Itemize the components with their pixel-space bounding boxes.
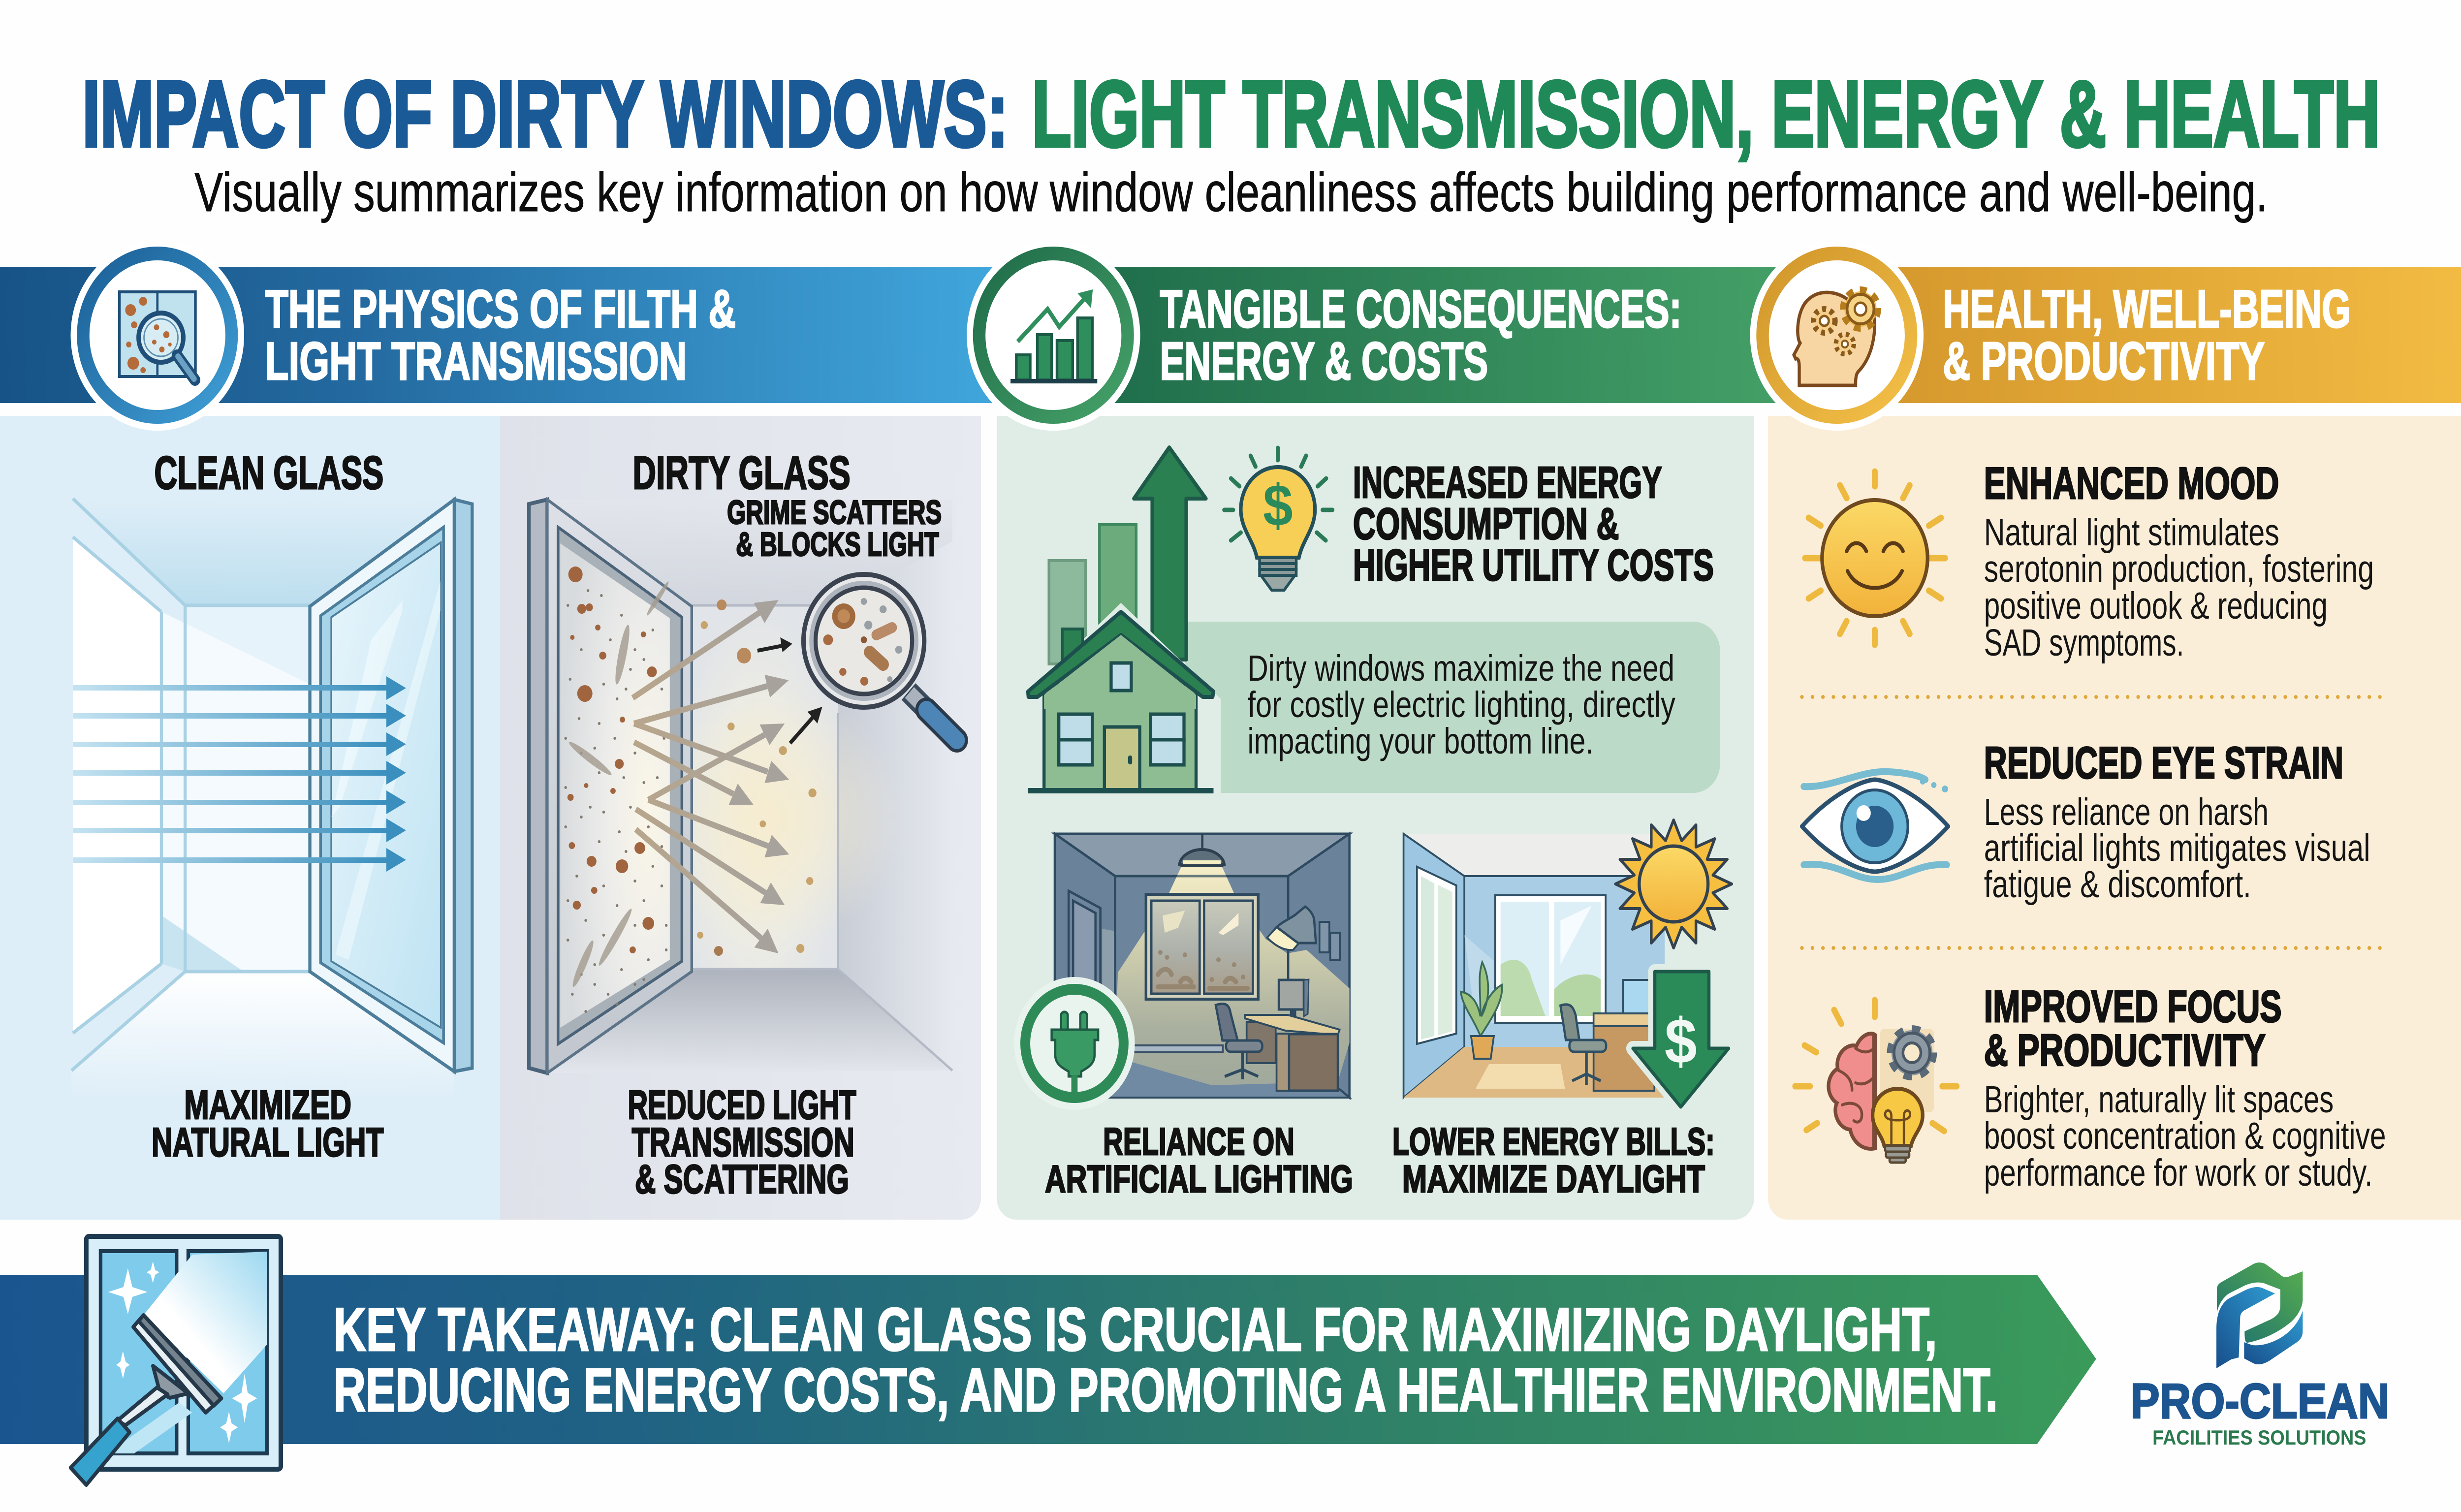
block: improved focus text: Brighter, naturally lit spaces [1984,1078,2334,1120]
ceiling [73,499,454,606]
callout: dirty windows text box [1185,622,1720,793]
label: reduced light transmission and scattering: REDUCED LIGHT [628,1082,856,1128]
header text: consequences [1160,280,1682,391]
heading: increased energy: INCREASED ENERGY [1353,458,1662,507]
dirty room walls [547,500,952,1073]
callout: dirty windows text box: for costly electric lighting, directly [1248,684,1675,725]
icon: bars, arrow and house [1022,447,1221,797]
header band: consequences [1053,267,1776,403]
block: reduced eye strain text: artificial lights mitigates visual [1984,826,2370,869]
label: reduced light transmission and scattering: TRANSMISSION [632,1119,854,1165]
block: improved focus text: IMPROVED FOCUS [1984,982,2282,1032]
label: grime scatters and blocks light [727,493,942,563]
label: grime scatters and blocks light: GRIME SCATTERS [727,493,942,531]
key takeaway text: KEY TAKEAWAY: CLEAN GLASS IS CRUCIAL FOR MAXIMIZING DAYLIGHT, [334,1296,1937,1364]
block: reduced eye strain text: Less reliance on harsh [1984,790,2269,833]
heading: clean glass: CLEAN GLASS [154,447,383,499]
icon: brain, gear and bulb [1795,1000,1956,1163]
label: maximized natural light [152,1082,383,1165]
block: reduced eye strain text: fatigue & discomfort. [1984,863,2251,905]
label: maximized natural light: MAXIMIZED [184,1082,351,1128]
label: reliance on artificial lighting [1045,1120,1353,1200]
ceiling lamp [1179,834,1224,867]
title: IMPACT OF DIRTY WINDOWS: [82,62,1009,166]
desk lamp [1267,907,1340,979]
icon: smiling sun [1805,472,1945,645]
heading: increased energy: CONSUMPTION & [1353,499,1619,549]
light rays [73,676,406,872]
block: improved focus text: & PRODUCTIVITY [1984,1026,2266,1075]
header band: physics [0,267,994,403]
icon: light bulb with dollar sign [1224,448,1332,590]
illustration: bright room with daylight [1404,834,1665,1098]
potted plant [1461,962,1502,1059]
heading: dirty glass: DIRTY GLASS [632,447,851,499]
callout: dirty windows text box: impacting your bottom line. [1248,721,1594,761]
label: grime scatters and blocks light: & BLOCKS LIGHT [736,525,939,563]
label: reduced light transmission and scattering [628,1082,856,1202]
pointer arrows [757,637,822,743]
bright desk, monitor and chair [1560,980,1654,1091]
block: reduced eye strain text: REDUCED EYE STRAIN [1984,738,2343,788]
clean window frame [310,500,472,1071]
icon: head with gears [1750,240,1924,431]
back window [1495,895,1606,1023]
side window [1417,867,1456,1044]
office door [1069,891,1101,985]
panel: health background [1768,416,2461,1220]
block: enhanced mood text: positive outlook & reducing [1984,584,2328,627]
scattered light arrows [632,600,789,953]
header text: health: HEALTH, WELL-BEING [1943,279,2351,339]
icon: light bulb with dollar sign: $ [1263,472,1293,538]
header band: health [1837,267,2461,403]
block: enhanced mood text [1984,459,2374,663]
icon: sun [1615,820,1732,948]
illustration: dirty room with scattered light [529,500,957,1073]
block: improved focus text: boost concentration & cognitive [1984,1114,2386,1157]
magnifying glass [803,574,957,740]
subtitle: Visually summarizes key information on how window cleanliness affects building performance and well-being. [194,161,2268,223]
block: enhanced mood text: ENHANCED MOOD [1984,459,2279,508]
icon: down arrow with dollar [1633,972,1729,1107]
key takeaway text [334,1296,1998,1424]
label: lower energy bills [1392,1120,1715,1200]
title: LIGHT TRANSMISSION, ENERGY & HEALTH [1032,62,2380,166]
header text: physics: LIGHT TRANSMISSION [265,332,687,391]
block: enhanced mood text: serotonin production, fostering [1984,547,2374,590]
panel: physics of filth background [0,416,981,1220]
key takeaway banner [0,1275,2096,1444]
label: reliance on artificial lighting: ARTIFICIAL LIGHTING [1045,1158,1353,1200]
header text: health [1943,279,2351,391]
icon: window with squeegee [71,1236,281,1485]
heading: increased energy [1353,458,1714,590]
key takeaway text: REDUCING ENERGY COSTS, AND PROMOTING A HEALTHIER ENVIRONMENT. [334,1356,1998,1424]
squeegee [71,1315,221,1485]
icon: eye [1802,772,1948,880]
block: enhanced mood text: Natural light stimulates [1984,511,2279,553]
illustration: clean room with light rays [71,499,472,1098]
logo: pro-clean: FACILITIES SOLUTIONS [2152,1426,2366,1449]
label: lower energy bills: LOWER ENERGY BILLS: [1392,1120,1715,1163]
office desk, monitor and chair [1216,979,1340,1091]
label: maximized natural light: NATURAL LIGHT [152,1119,383,1165]
block: improved focus text: performance for work or study. [1984,1151,2372,1194]
dirt specks [566,567,817,1011]
title [82,62,2380,166]
block: reduced eye strain text [1984,738,2370,905]
header text: consequences: ENERGY & COSTS [1160,332,1488,391]
label: reduced light transmission and scattering: & SCATTERING [635,1156,849,1202]
icon: window with magnifier [71,240,244,431]
panel: energy and costs background [997,416,1754,1220]
label: lower energy bills: MAXIMIZE DAYLIGHT [1402,1158,1705,1200]
header text: physics: THE PHYSICS OF FILTH & [265,280,736,339]
block: improved focus text [1984,982,2386,1194]
header text: consequences: TANGIBLE CONSEQUENCES: [1160,280,1682,339]
heading: increased energy: HIGHER UTILITY COSTS [1353,540,1714,590]
block: enhanced mood text: SAD symptoms. [1984,621,2184,663]
icon: rising bar chart [967,240,1140,431]
logo: pro-clean [2131,1262,2390,1449]
icon: electric plug [1014,977,1135,1110]
logo mark [2216,1262,2303,1368]
dirty office window [1146,894,1258,999]
logo: pro-clean: PRO-CLEAN [2131,1374,2390,1429]
callout: dirty windows text box: Dirty windows maximize the need [1248,648,1674,689]
illustration: dark room with artificial light [1055,834,1350,1098]
header text: health: & PRODUCTIVITY [1943,331,2265,391]
icon: down arrow with dollar: $ [1665,1006,1697,1077]
header text: physics [265,280,736,391]
label: reliance on artificial lighting: RELIANCE ON [1103,1120,1294,1163]
dirty window frame [529,500,692,1073]
